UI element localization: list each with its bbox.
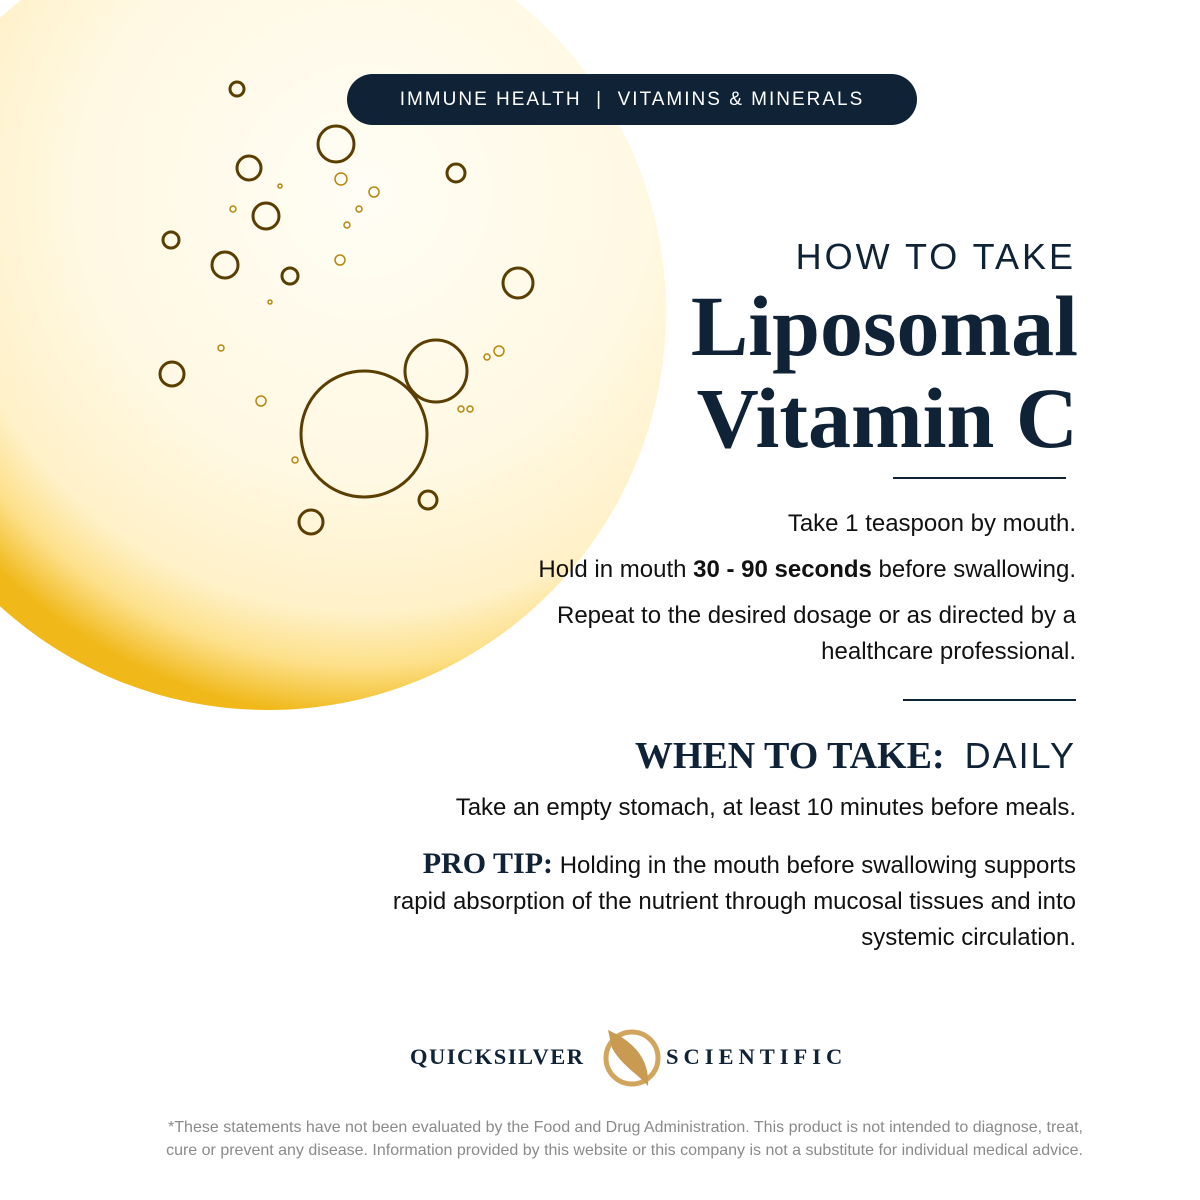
title: Liposomal bbox=[691, 278, 1078, 374]
logo: SCIENTIFIC bbox=[666, 1044, 847, 1069]
drop illustration with bubbles bbox=[0, 0, 666, 710]
directions text: Repeat to the desired dosage or as directed by a bbox=[557, 602, 1076, 629]
category pill: IMMUNE HEALTH | VITAMINS & MINERALS bbox=[400, 89, 864, 110]
directions text: Hold in mouth 30 - 90 seconds before swallowing. bbox=[538, 556, 1076, 583]
pro tip: PRO TIP: Holding in the mouth before swallowing supports bbox=[423, 847, 1076, 880]
when to take heading: WHEN TO TAKE: DAILY bbox=[635, 735, 1076, 777]
logo: QUICKSILVER bbox=[410, 1044, 584, 1069]
disclaimer: *These statements have not been evaluated by the Food and Drug Administration. This product is not intended to diagnose, treat, cure or prevent any disease. Information provided by this website or this company is not a substitute for individual medical advice. bbox=[166, 1119, 1083, 1159]
when to take text: Take an empty stomach, at least 10 minutes before meals. bbox=[456, 794, 1076, 821]
pro tip: systemic circulation. bbox=[861, 924, 1076, 951]
directions text: Take 1 teaspoon by mouth. bbox=[788, 510, 1076, 537]
icon: logo mark bbox=[604, 1030, 660, 1086]
directions text: healthcare professional. bbox=[821, 638, 1076, 665]
logo bbox=[410, 1030, 847, 1086]
pro tip bbox=[393, 847, 1076, 951]
title bbox=[691, 278, 1078, 466]
title: Vitamin C bbox=[697, 370, 1078, 466]
pro tip: rapid absorption of the nutrient through mucosal tissues and into bbox=[393, 888, 1076, 915]
directions text bbox=[538, 510, 1076, 665]
category pill bbox=[347, 74, 917, 125]
heading: how to take: HOW TO TAKE bbox=[796, 236, 1076, 277]
